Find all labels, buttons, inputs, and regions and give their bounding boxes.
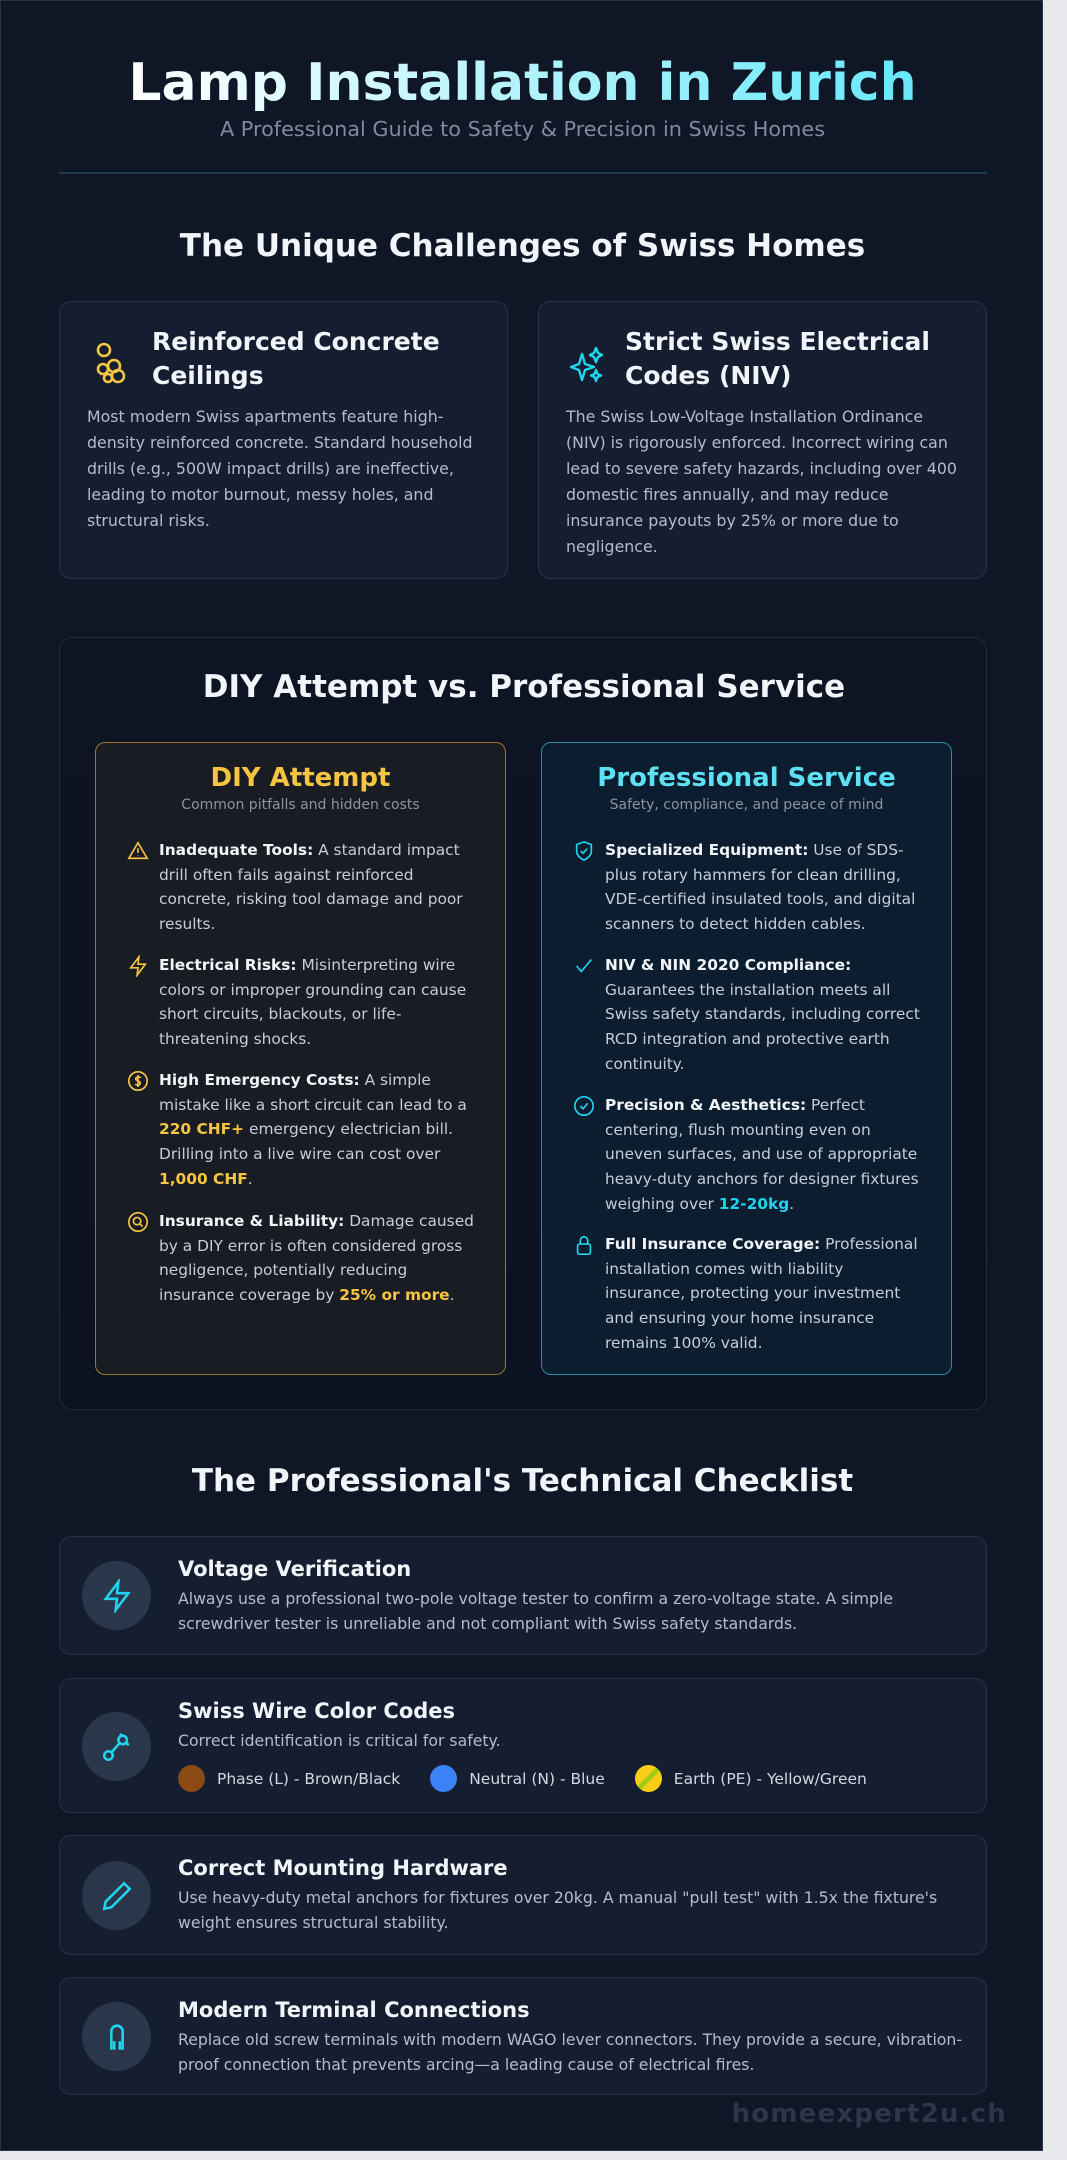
item: electrical: Electrical Risks: Misinterpreting wire colors or improper grounding can cause short circuits, blackouts, or life-threatening shocks. bbox=[159, 956, 466, 1048]
column subtitle: Safety, compliance, and peace of mind bbox=[610, 797, 883, 813]
icon: sparkles bbox=[570, 346, 604, 382]
heading: challenges: The Unique Challenges of Swiss Homes bbox=[180, 228, 865, 264]
icon: concrete bbox=[96, 342, 126, 384]
legend: wire colors bbox=[178, 1765, 867, 1792]
item: insurance: Insurance & Liability: Damage caused by a DIY error is often considered gross negligence, potentially reducing insurance coverage by 25% or more. bbox=[159, 1212, 474, 1304]
item: equipment: Specialized Equipment: Use of SDS-plus rotary hammers for clean drilling, VDE-certified insulated tools, and digital scanners to detect hidden cables. bbox=[605, 841, 915, 933]
panel: DIY vs professional bbox=[59, 637, 987, 1410]
card text: The Swiss Low-Voltage Installation Ordinance (NIV) is rigorously enforced. Incorrect wiring can lead to severe safety hazards, including over 400 domestic fires annually, and may reduce insurance payouts by 25% or more due to negligence. bbox=[566, 407, 957, 556]
icon: connector bbox=[82, 2002, 151, 2071]
item: insurance coverage: Full Insurance Coverage: Professional installation comes with liability insurance, protecting your investment and ensuring your home insurance remains 100% valid. bbox=[605, 1235, 918, 1352]
column heading: Professional Service bbox=[597, 763, 896, 793]
panel: electrical codes bbox=[538, 301, 987, 579]
column: DIY bbox=[95, 742, 506, 1375]
checklist: wire colors: Correct identification is critical for safety. bbox=[178, 1731, 501, 1750]
subtitle: A Professional Guide to Safety & Precision in Swiss Homes bbox=[220, 117, 825, 141]
icon: plug bbox=[82, 1712, 151, 1781]
card heading: Reinforced Concrete bbox=[152, 327, 440, 356]
checklist: terminals: Modern Terminal Connections bbox=[178, 1998, 530, 2022]
column: professional bbox=[541, 742, 952, 1375]
card text: Most modern Swiss apartments feature high-density reinforced concrete. Standard household drills (e.g., 500W impact drills) are ineffective, leading to motor burnout, messy holes, and structural risks. bbox=[87, 407, 473, 530]
checklist: voltage bbox=[59, 1536, 987, 1655]
icon: bolt bbox=[82, 1561, 151, 1630]
item: tools: Inadequate Tools: A standard impact drill often fails against reinforced concrete, risking tool damage and poor results. bbox=[159, 841, 463, 933]
card heading: Codes (NIV) bbox=[625, 361, 791, 390]
card heading bbox=[625, 327, 930, 390]
icon: pencil bbox=[82, 1861, 151, 1930]
card heading bbox=[152, 327, 440, 390]
watermark: homeexpert2u.ch bbox=[732, 2099, 1007, 2129]
item: costs: High Emergency Costs: A simple mistake like a short circuit can lead to a 220 CHF+ emergency electrician bill. Drilling into a live wire can cost over 1,000 CHF. bbox=[159, 1071, 467, 1188]
checklist: voltage: Voltage Verification bbox=[178, 1557, 411, 1581]
panel: concrete ceilings bbox=[59, 301, 508, 579]
title: Lamp Installation in Zurich bbox=[128, 53, 917, 113]
card heading: Strict Swiss Electrical bbox=[625, 327, 930, 356]
checklist: wire colors bbox=[59, 1678, 987, 1813]
checklist: mounting bbox=[59, 1835, 987, 1955]
checklist: wire colors: Swiss Wire Color Codes bbox=[178, 1699, 455, 1723]
checklist: voltage: Always use a professional two-pole voltage tester to confirm a zero-voltage state. A simple screwdriver tester is unreliable and not compliant with Swiss safety standards. bbox=[178, 1589, 893, 1633]
legend: wire colors: Phase (L) - Brown/Black Neutral (N) - Blue Earth (PE) - Yellow/Green bbox=[217, 1770, 867, 1788]
column heading: DIY Attempt bbox=[211, 763, 390, 793]
column subtitle: Common pitfalls and hidden costs bbox=[181, 797, 420, 813]
heading: checklist: The Professional's Technical Checklist bbox=[192, 1463, 853, 1499]
item: precision: Precision & Aesthetics: Perfect centering, flush mounting even on uneven surfaces, and use of appropriate heavy-duty anchors for designer fixtures weighing over 12-20kg. bbox=[605, 1096, 919, 1213]
checklist: mounting: Use heavy-duty metal anchors for fixtures over 20kg. A manual "pull test" with 1.5x the fixture's weight ensures structural stability. bbox=[178, 1888, 937, 1932]
heading: comparison: DIY Attempt vs. Professional Service bbox=[203, 669, 845, 705]
checklist: terminals: Replace old screw terminals with modern WAGO lever connectors. They provide a secure, vibration-proof connection that prevents arcing—a leading cause of electrical fires. bbox=[178, 2030, 962, 2074]
card heading: Ceilings bbox=[152, 361, 264, 390]
item: compliance: NIV & NIN 2020 Compliance: Guarantees the installation meets all Swiss safety standards, including correct RCD integration and protective earth continuity. bbox=[605, 956, 920, 1073]
checklist: mounting: Correct Mounting Hardware bbox=[178, 1856, 508, 1880]
checklist: terminals bbox=[59, 1977, 987, 2095]
